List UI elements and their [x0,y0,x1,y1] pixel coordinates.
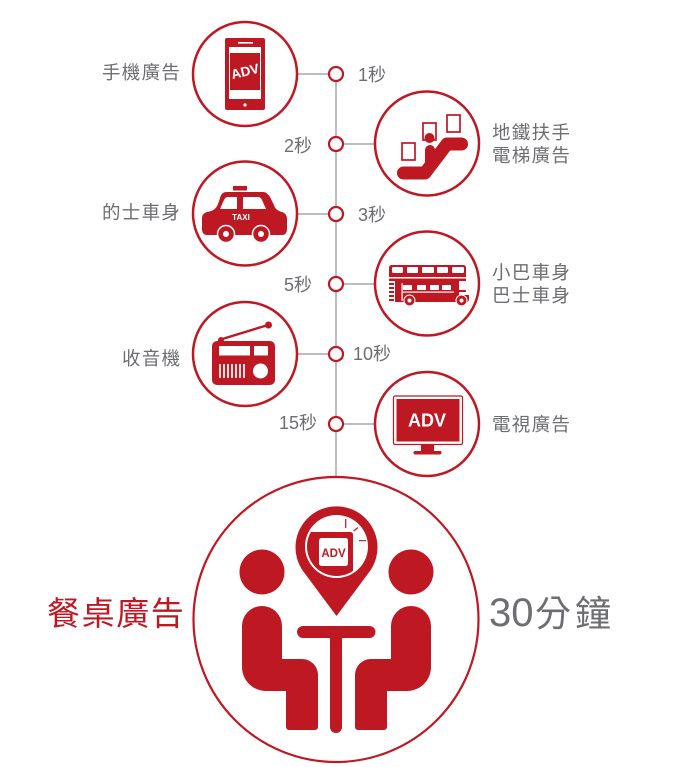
icon: taxi: TAXI [232,213,250,222]
medium labels: 的士車身 [102,202,181,223]
main duration: 30 minutes: 鐘 [575,593,611,634]
main label: dining table ads: 餐桌廣告 [47,595,185,632]
duration labels [279,65,391,433]
duration labels: 2秒 [284,136,312,156]
duration labels: 5秒 [284,275,312,295]
panel: radio ad [193,302,297,406]
timeline axis [296,74,378,480]
duration labels: 10秒 [353,344,391,364]
main duration: 30 minutes: 30 [489,591,534,635]
duration labels: 15秒 [279,413,317,433]
timeline nodes [329,67,343,431]
icon: phone: ADV [229,61,261,82]
medium labels: 電梯廣告 [492,145,571,166]
medium labels: 電視廣告 [492,414,571,435]
panel: escalator ad [375,92,479,196]
panel: mobile phone ad [193,22,297,126]
icon: escalator [402,115,462,173]
medium labels: 巴士車身 [492,285,571,306]
icon: location pin with ADV: ADV [321,548,346,560]
medium labels: 小巴車身 [492,262,571,283]
medium labels [102,62,571,435]
panel: TV ad [375,372,479,476]
medium labels: 地鐵扶手 [492,122,571,143]
duration labels: 1秒 [358,65,386,85]
panel: dining table ad [194,477,478,762]
panel: bus ad [375,232,479,336]
medium labels: 收音機 [122,348,181,369]
main duration: 30 minutes: 分 [535,593,571,634]
panel: taxi ad [193,162,297,266]
icon: television: ADV [408,410,446,430]
icon: people at table [240,550,434,733]
icon: double decker bus [389,265,469,306]
icon: radio [212,322,275,385]
duration labels: 3秒 [358,205,386,225]
medium labels: 手機廣告 [102,62,181,83]
icon: location pin with ADV [296,506,378,616]
